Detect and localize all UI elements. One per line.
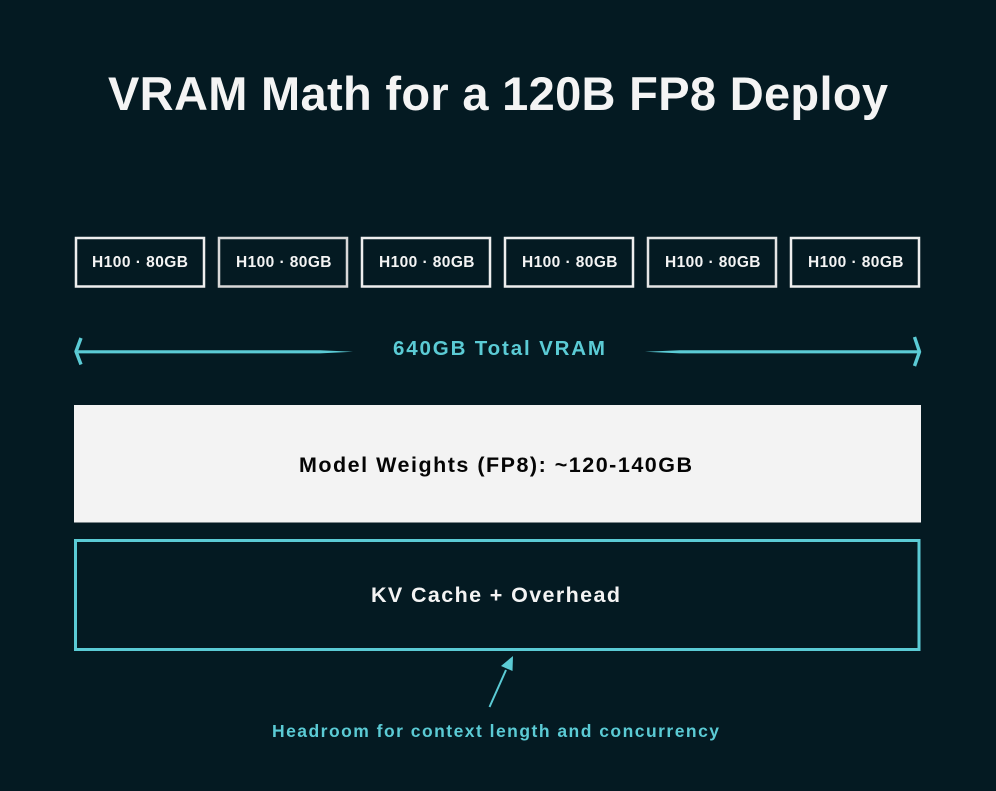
panel: model weights xyxy=(74,405,921,522)
panel: KV cache and overhead xyxy=(76,540,919,650)
arrow: headroom pointer xyxy=(490,656,513,707)
model weights label: Model Weights (FP8): ~120-140GB xyxy=(299,453,692,477)
GPU card 5 xyxy=(648,238,776,286)
headroom caption: Headroom for context length and concurrency xyxy=(272,721,719,741)
GPU card 6 xyxy=(791,238,919,286)
GPU card 4: H100 · 80GB xyxy=(522,254,618,271)
GPU card 1 xyxy=(76,238,204,286)
KV cache label: KV Cache + Overhead xyxy=(371,583,620,607)
GPU card 5: H100 · 80GB xyxy=(665,254,760,271)
arrow: left span xyxy=(76,338,353,364)
total VRAM label: 640GB Total VRAM xyxy=(393,337,605,360)
GPU card 3 xyxy=(362,238,490,286)
GPU card 4 xyxy=(505,238,633,286)
GPU card 3: H100 · 80GB xyxy=(379,254,474,271)
title: VRAM Math for a 120B FP8 Deploy xyxy=(108,67,888,120)
GPU card 2 xyxy=(219,238,347,286)
GPU card 2: H100 · 80GB xyxy=(236,254,332,271)
arrow: right span xyxy=(645,337,920,366)
GPU card 6: H100 · 80GB xyxy=(808,254,904,271)
GPU row xyxy=(76,238,919,286)
GPU card 1: H100 · 80GB xyxy=(92,254,188,271)
